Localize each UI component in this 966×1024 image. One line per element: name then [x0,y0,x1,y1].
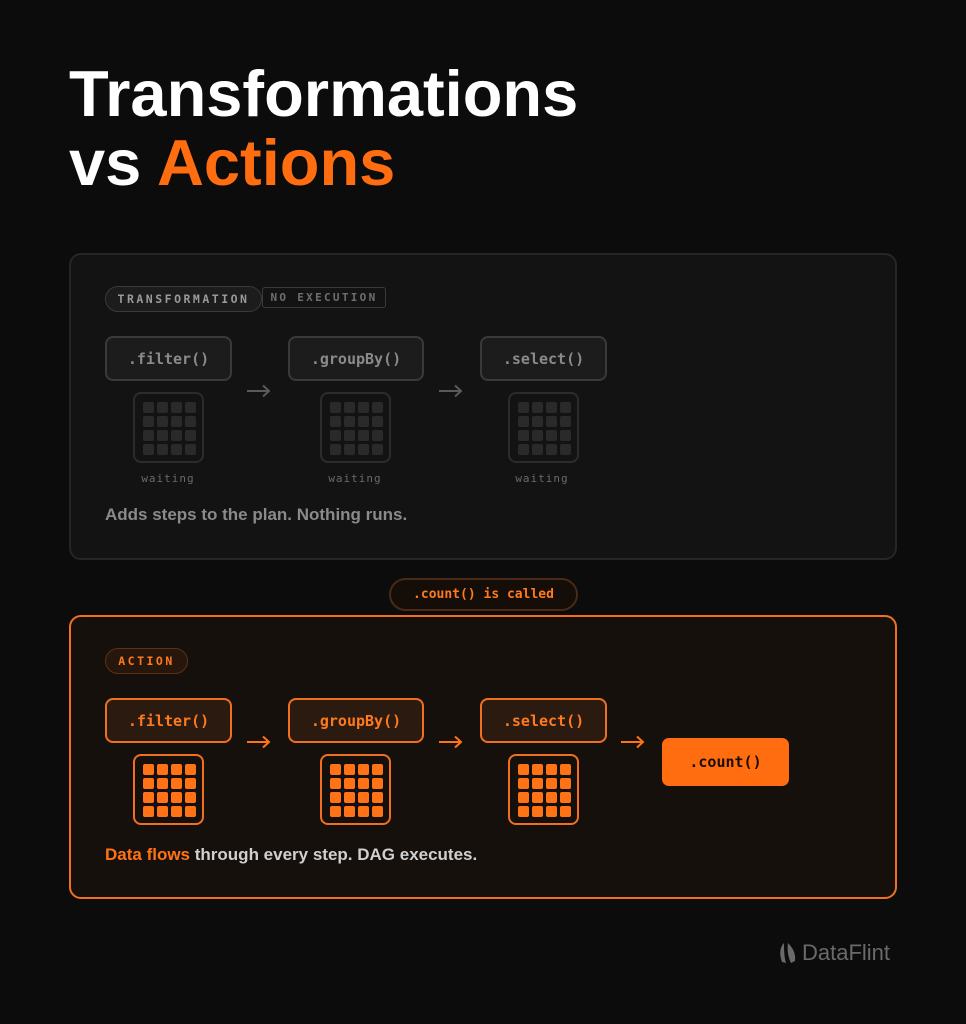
arrow 1 [247,384,270,398]
panel: action [69,615,897,899]
step: filter [105,336,232,381]
grid: select [508,754,579,825]
step: select [480,336,607,381]
grid: groupBy [320,392,391,463]
callout: count is called: .count() is called [413,587,554,602]
step: groupBy [288,336,424,381]
caption: Adds steps to the plan. Nothing runs. [105,505,407,524]
arrow 3 [621,736,644,748]
title: vs Actions [69,126,395,199]
grid: filter [133,392,204,463]
label: waiting 1: waiting [141,472,195,485]
panel: transformation [69,253,897,560]
tag: transformation: TRANSFORMATION [118,292,249,306]
step: filter [105,698,232,743]
tag: transformation [105,286,262,312]
arrow 1 [247,736,270,748]
grid: filter [133,754,204,825]
grid: groupBy [320,754,391,825]
caption: Data flows through every step. DAG executes. [105,845,477,864]
title: Transformations [69,57,578,130]
logo: DataFlint: DataFlint [802,940,890,965]
step: select [480,698,607,743]
label: waiting 2: waiting [328,472,382,485]
step: groupBy: .groupBy() [311,350,401,368]
grid: select [508,392,579,463]
result: count: .count() [689,753,762,771]
arrow 2 [439,384,462,398]
step: groupBy: .groupBy() [311,712,401,730]
tag: no execution: NO EXECUTION [270,291,378,304]
tag: no execution [262,287,386,308]
tag: action [105,648,188,674]
callout: count is called [389,578,578,611]
step: select: .select() [503,712,584,730]
result: count [662,738,789,786]
step: filter: .filter() [128,712,209,730]
step: filter: .filter() [128,350,209,368]
label: waiting 3: waiting [515,472,569,485]
arrow 2 [439,736,462,748]
tag: action: ACTION [118,654,175,668]
step: select: .select() [503,350,584,368]
title [69,57,578,199]
icon: flint [780,943,796,963]
step: groupBy [288,698,424,743]
